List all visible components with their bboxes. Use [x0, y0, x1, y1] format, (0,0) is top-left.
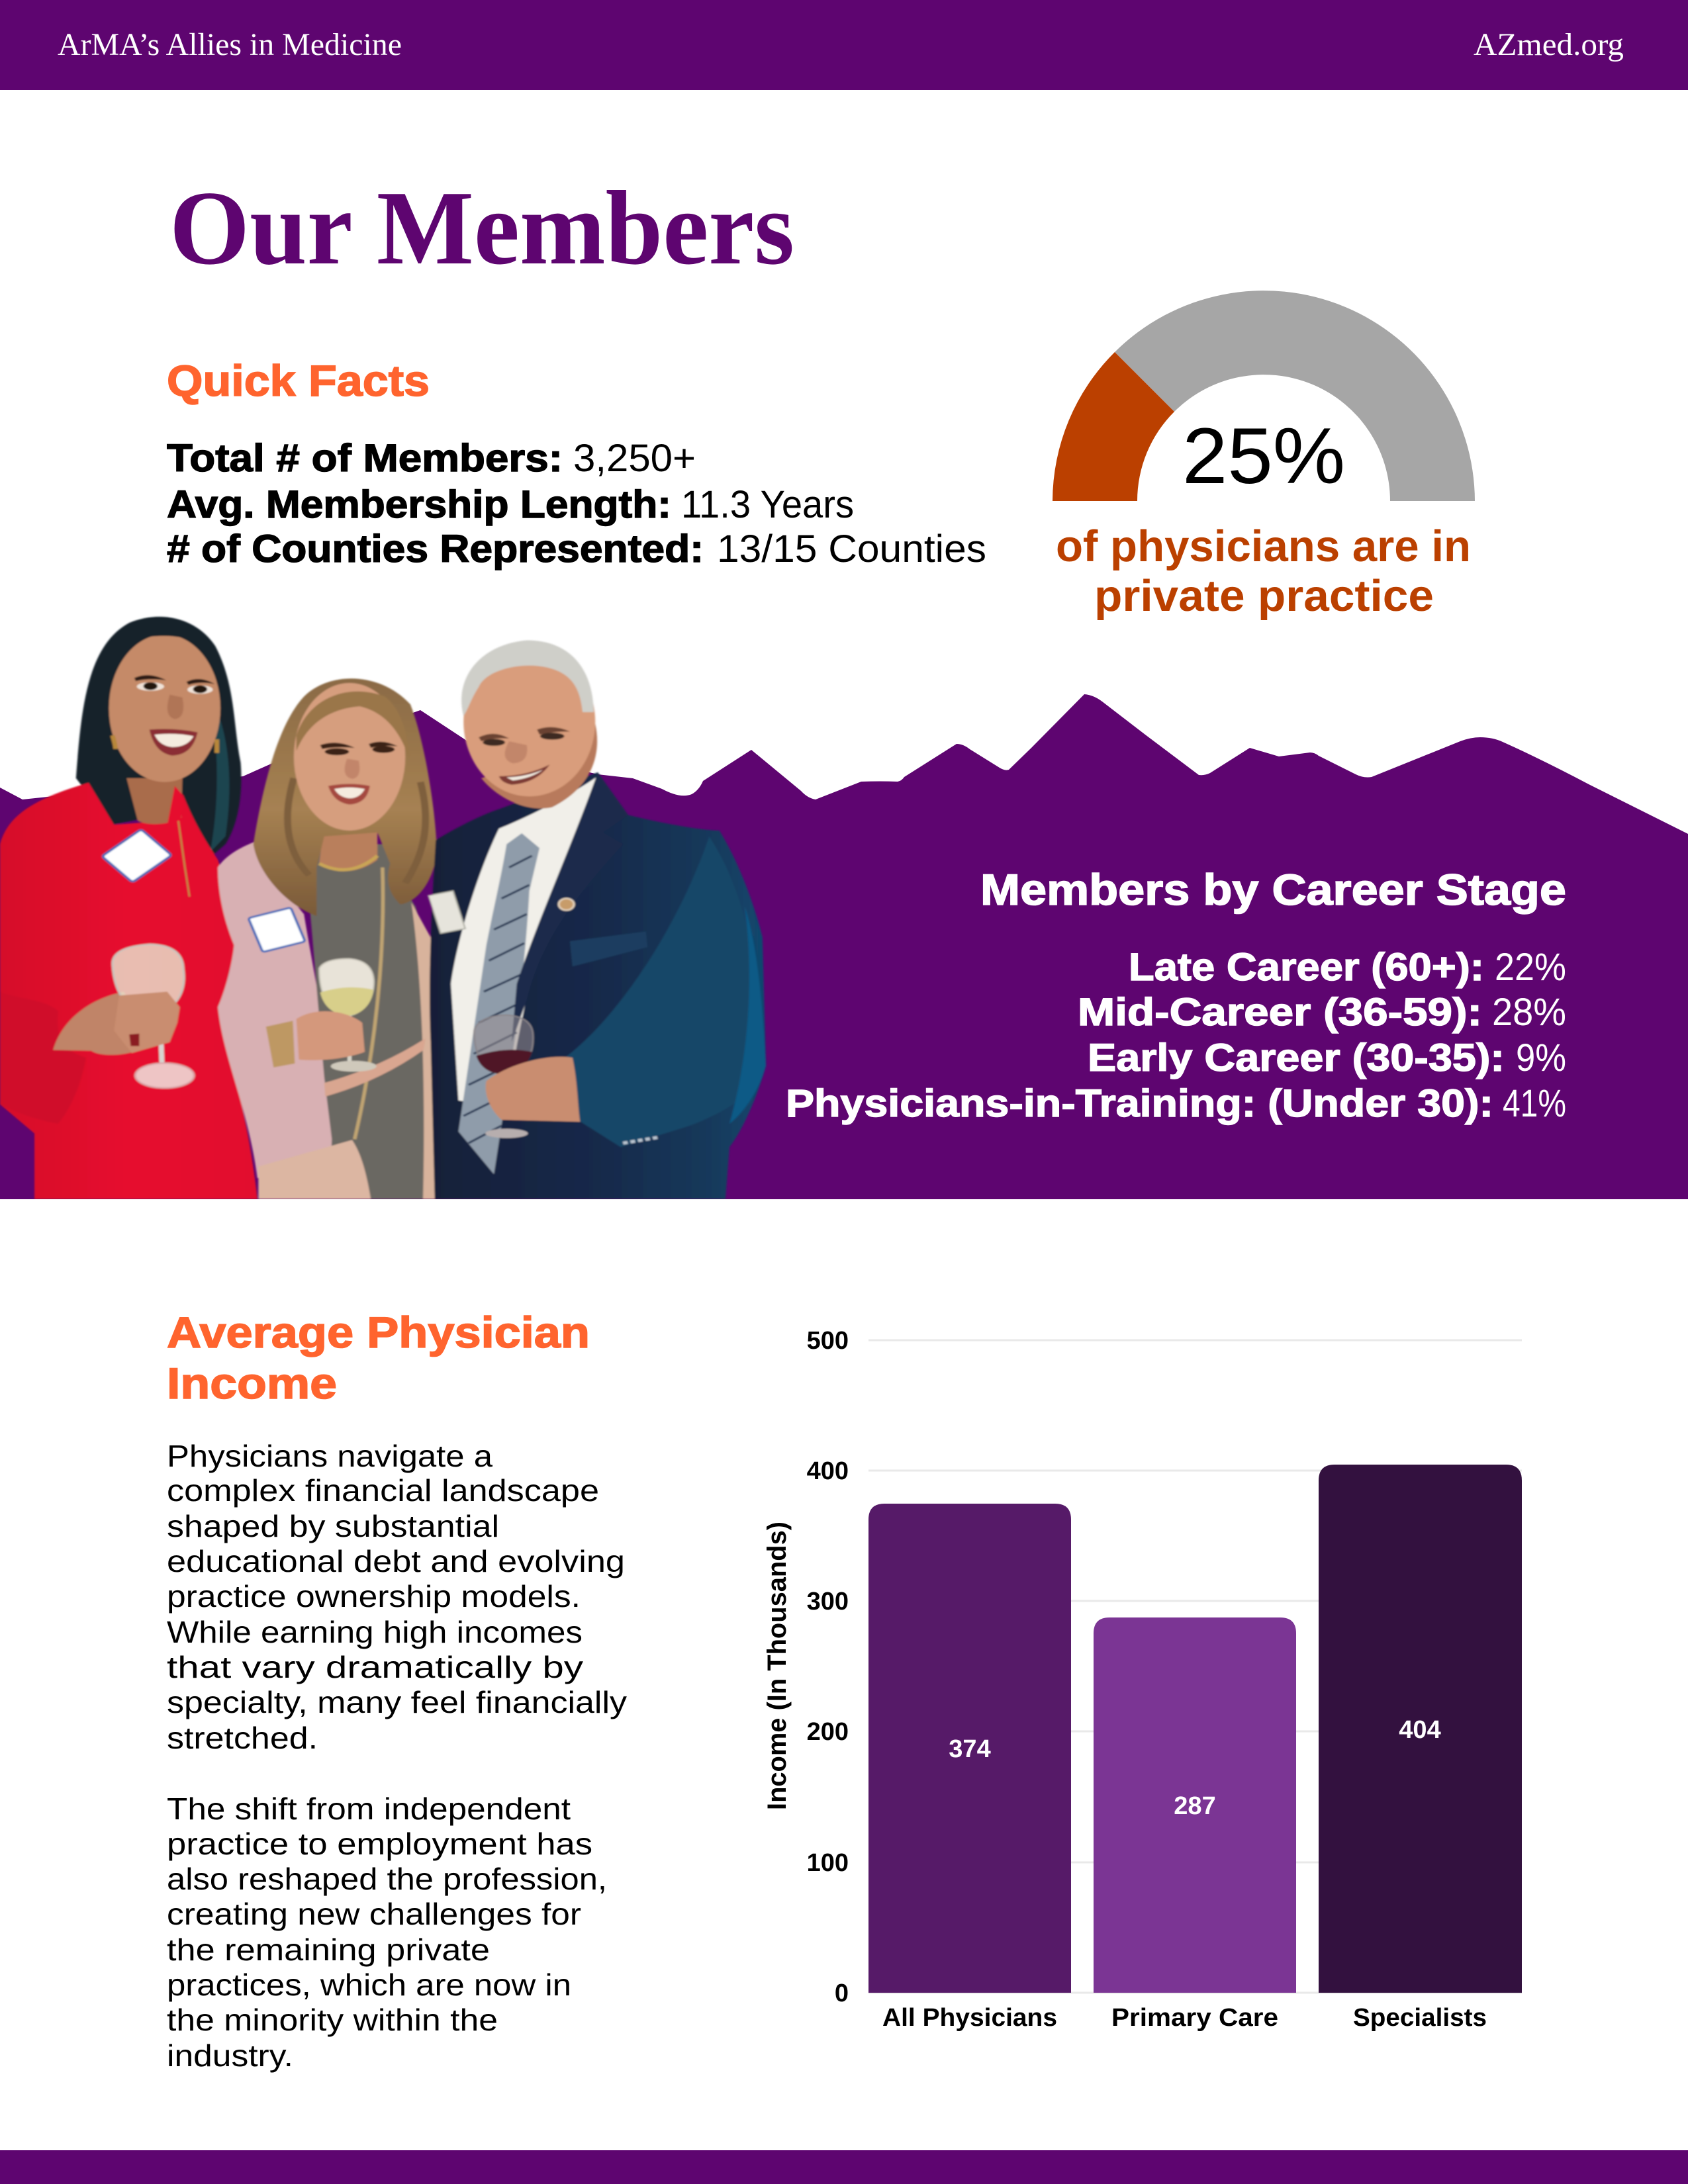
person: man in navy suit	[428, 640, 766, 1199]
text block: paragraph two: the minority within the	[167, 2003, 498, 2037]
header left text: ArMA’s Allies in Medicine	[58, 27, 402, 62]
x axis labels: Primary Care	[1111, 2004, 1278, 2032]
text block: paragraph one: stretched.	[167, 1721, 318, 1755]
header right text: AZmed.org	[1474, 27, 1624, 62]
y axis labels: 0	[835, 1979, 849, 2007]
stat: late career: Late Career (60+):	[1129, 946, 1484, 989]
y axis labels: 300	[807, 1588, 849, 1615]
panel: quick facts	[167, 356, 986, 570]
fact: membership length: 11.3 Years	[681, 483, 854, 526]
y axis labels	[807, 1327, 849, 2007]
y axis title: Income (In Thousands)	[763, 1522, 792, 1810]
bar: specialists	[1319, 1465, 1522, 1993]
panel: average physician income	[167, 1308, 627, 2073]
stat: physicians in training: Physicians-in-Training: (Under 30):	[786, 1082, 1493, 1125]
heading: quick facts: Quick Facts	[167, 356, 430, 405]
text block: paragraph one: specialty, many feel financially	[167, 1685, 627, 1719]
y axis labels: 400	[807, 1457, 849, 1485]
text block: paragraph one: educational debt and evolving	[167, 1544, 625, 1578]
person: woman with pink cardigan	[218, 678, 437, 1199]
y axis labels: 200	[807, 1718, 849, 1746]
text block: paragraph one: practice ownership models.	[167, 1579, 581, 1614]
fact: membership length: Avg. Membership Length:	[167, 483, 671, 526]
lapel pin	[559, 899, 574, 910]
heading: career stage: Members by Career Stage	[980, 865, 1566, 914]
text block: paragraph two: creating new challenges for	[167, 1897, 581, 1931]
stat: early career: 9%	[1516, 1036, 1566, 1079]
stat: mid career: Mid-Career (36-59):	[1078, 991, 1482, 1034]
bar values: 287	[1174, 1792, 1216, 1820]
x axis labels: All Physicians	[882, 2004, 1057, 2032]
text block: paragraph two	[167, 1792, 607, 2073]
text block: paragraph two: also reshaped the profession,	[167, 1862, 607, 1896]
bar chart: income	[763, 1327, 1522, 2032]
gauge caption: of physicians are in	[1056, 522, 1471, 571]
fact: counties	[167, 527, 986, 570]
bar values: 374	[949, 1735, 991, 1763]
wine glass	[319, 959, 377, 1071]
gauge caption	[1056, 522, 1471, 621]
x axis labels	[882, 2004, 1487, 2032]
text block: paragraph two: The shift from independent	[167, 1792, 571, 1826]
gauge remainder arc	[1115, 291, 1475, 501]
bar values: 404	[1399, 1716, 1441, 1744]
gauge 25% arc	[1053, 352, 1174, 501]
name tag	[428, 891, 465, 933]
stat: late career: 22%	[1495, 946, 1566, 989]
bar: primary care	[1094, 1617, 1296, 1993]
text block: paragraph two: industry.	[167, 2038, 293, 2073]
mountain band	[0, 694, 1688, 1199]
footer bar	[0, 2150, 1688, 2184]
x axis labels: Specialists	[1353, 2004, 1487, 2032]
gauge caption: private practice	[1094, 571, 1434, 621]
name tag	[248, 907, 305, 952]
y axis labels: 500	[807, 1327, 849, 1355]
text block: paragraph one: Physicians navigate a	[167, 1439, 492, 1473]
photo: three physicians	[0, 617, 766, 1199]
stat: physicians in training: 41%	[1503, 1082, 1566, 1125]
fact: counties: 13/15 Counties	[717, 527, 986, 570]
stat: early career: Early Career (30-35):	[1088, 1036, 1505, 1079]
text block: paragraph two: practices, which are now in	[167, 1968, 571, 2002]
fact: membership length	[167, 483, 854, 526]
heading: average physician income: Income	[167, 1359, 337, 1408]
wine glass	[113, 944, 194, 1088]
text block: paragraph one: While earning high incomes	[167, 1615, 583, 1649]
text block: paragraph two: practice to employment has	[167, 1827, 592, 1861]
stat: mid career: 28%	[1492, 991, 1566, 1034]
name tag	[102, 829, 171, 882]
title: Our Members	[169, 169, 794, 287]
text block: paragraph one: complex financial landscape	[167, 1473, 599, 1508]
gauge chart: 25% private practice	[1053, 291, 1475, 621]
gauge value: 25%	[1182, 412, 1345, 500]
text block: paragraph one: shaped by substantial	[167, 1509, 499, 1543]
heading: average physician income	[167, 1308, 590, 1408]
heading: average physician income: Average Physician	[167, 1308, 590, 1357]
bar: all physicians	[868, 1504, 1071, 1993]
fact: counties: # of Counties Represented:	[167, 527, 704, 570]
panel: members by career stage	[786, 865, 1566, 1125]
text block: paragraph one: that vary dramatically by	[167, 1650, 583, 1684]
person: woman in red dress	[0, 617, 258, 1199]
wine glass	[474, 1015, 533, 1138]
fact: total members: 3,250+	[573, 437, 696, 480]
text block: paragraph one	[167, 1439, 627, 1755]
bar values	[949, 1716, 1441, 1820]
fact: total members: Total # of Members:	[167, 437, 563, 480]
y axis labels: 100	[807, 1849, 849, 1877]
fact: total members	[167, 437, 696, 480]
text block: paragraph two: the remaining private	[167, 1933, 490, 1967]
header bar	[0, 0, 1688, 90]
